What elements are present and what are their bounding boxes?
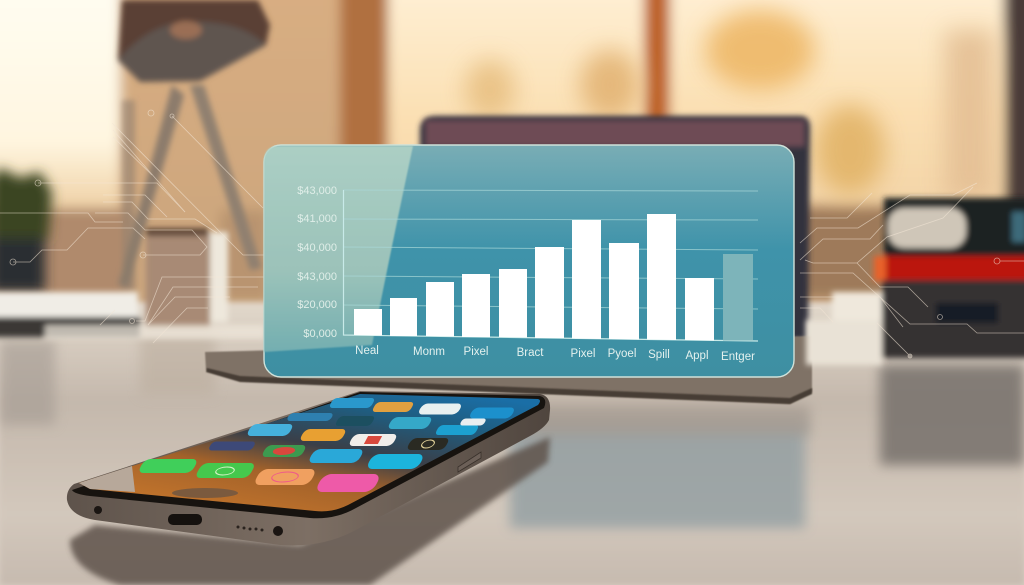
- y axis labels: $0,000: [303, 328, 337, 340]
- y axis labels: [297, 185, 337, 340]
- panel: glass chart card: [264, 145, 794, 377]
- right device stack: [806, 198, 1024, 365]
- laptop: [205, 116, 812, 404]
- x axis labels: Monm: [413, 346, 445, 358]
- light reflection on glass: [264, 146, 413, 352]
- table surface: [0, 302, 1024, 585]
- blurry bokeh in the windows: [465, 10, 995, 200]
- app icons: [137, 398, 516, 492]
- x axis labels: Entger: [721, 351, 755, 363]
- x axis labels: [355, 345, 755, 363]
- lamp: [118, 0, 270, 290]
- x axis labels: Bract: [517, 347, 544, 359]
- chart gridlines: [343, 190, 758, 309]
- y axis labels: $41,000: [297, 213, 337, 225]
- x axis labels: Pyoel: [608, 348, 636, 360]
- y axis labels: $40,000: [297, 242, 337, 254]
- y axis labels: $43,000: [297, 271, 337, 283]
- phone screen: [79, 394, 540, 511]
- circuit lines: [0, 110, 1024, 358]
- x axis labels: Pixel: [571, 348, 595, 360]
- potted plant: [0, 168, 52, 292]
- x axis labels: Neal: [355, 345, 379, 357]
- cube and books on the table: [0, 228, 265, 339]
- y axis labels: $20,000: [297, 299, 337, 311]
- ports: [94, 506, 102, 514]
- chart axes: [344, 190, 758, 341]
- x axis labels: Spill: [648, 349, 670, 361]
- phone reflection: [70, 437, 550, 585]
- phone bezel: [72, 392, 545, 518]
- home button: [172, 488, 238, 498]
- x axis labels: Pixel: [464, 346, 488, 358]
- bar chart: [354, 214, 753, 340]
- phone body: [67, 391, 550, 545]
- y axis labels: $43,000: [297, 185, 337, 197]
- smartphone: [67, 391, 550, 545]
- side button: [458, 452, 481, 472]
- x axis labels: Appl: [685, 350, 709, 362]
